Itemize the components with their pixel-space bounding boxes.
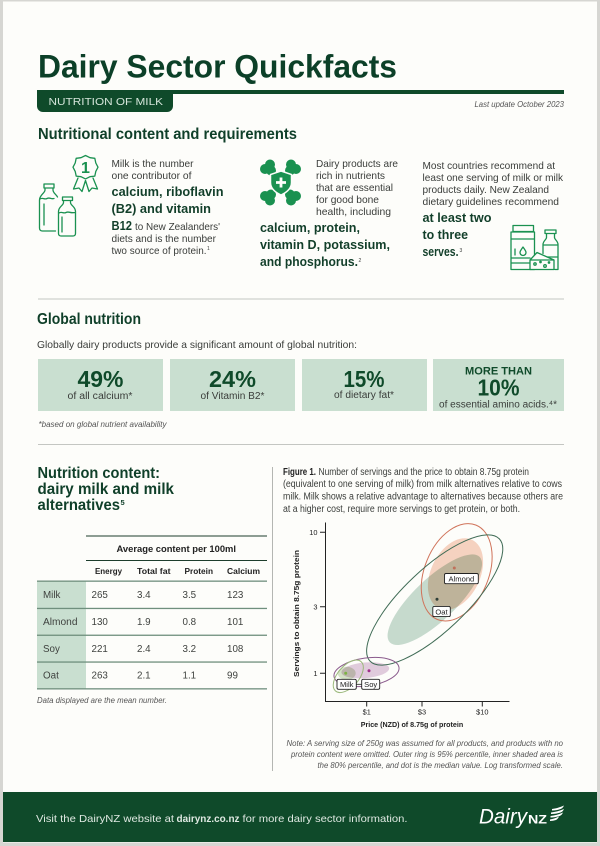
axis tick labels [309, 528, 488, 716]
stat card: calcium: 49% [78, 366, 124, 392]
icon: milk bottles with number one ribbon: 1 [81, 160, 90, 177]
axis tick labels: $3 [418, 708, 426, 716]
footer website text: for more dairy sector information. [242, 814, 408, 825]
nutrition table: Protein [184, 566, 213, 576]
nutrition table: 1.9 [137, 617, 151, 628]
nutrition table: 2.4 [137, 644, 151, 655]
text block: good bone health: that are essential [316, 183, 393, 194]
axes [320, 522, 510, 706]
header band: nutrition of milk [37, 90, 564, 112]
data label: milk and soy: Milk [340, 680, 354, 689]
text block: number one contributor: B12 [112, 218, 132, 233]
footer website text: dairynz.co.nz [176, 814, 240, 825]
text block: recommended serves: products daily. New Zealand [422, 185, 549, 196]
logo: DairyNZ: Dairy [479, 806, 528, 828]
axis tick labels: 3 [313, 602, 318, 612]
intro sentence: Globally dairy products provide a significant amount of global nutrition: [37, 340, 357, 351]
nutrition table: 3.2 [182, 644, 196, 655]
icon: bones and shield [260, 160, 301, 206]
stat card: vitamin B2: of Vitamin B2* [200, 391, 265, 402]
nutrition table: Almond [43, 617, 78, 628]
nutrition table [37, 536, 267, 690]
axis tick labels: 10 [309, 528, 318, 537]
figure caption: at a higher cost, require more servings to get protein, or both. [283, 504, 520, 515]
nutrition table: 0.8 [182, 617, 197, 628]
text block: number one contributor: Milk is the number [112, 159, 194, 170]
stat card: vitamin B2: 24% [209, 366, 256, 392]
text block: good bone health: Dairy products are [316, 159, 398, 170]
footer website text [36, 814, 408, 825]
footer website text: Visit the DairyNZ website at [36, 814, 174, 825]
outer 95 percent rings [328, 513, 521, 698]
stat card: dietary fat: 15% [344, 366, 384, 392]
heading: nutritional content and requirements: Nutritional content and requirements [38, 126, 297, 143]
text block: recommended serves: least one serving of milk or milk [422, 173, 564, 184]
data label: almond [444, 574, 478, 584]
icon: milk carton, bottle and cheese [511, 226, 558, 270]
text block: number one contributor: two source of protein. [112, 246, 206, 257]
axis tick labels: $1 [363, 708, 371, 716]
median dots [344, 566, 456, 675]
axis title: servings: Servings to obtain 8.75g protein [292, 550, 301, 677]
nutrition table: 2.1 [137, 670, 151, 682]
chart note: Note: A serving size of 250g was assumed for all products, and products with no [286, 739, 564, 748]
axis title: price: Price (NZD) of 8.75g of protein [361, 720, 463, 729]
footer band [3, 792, 597, 842]
chart note: protein content were omitted. Outer ring is 95% percentile, inner shaded area is [290, 750, 563, 759]
text block: recommended serves: dietary guidelines recommend [422, 197, 559, 208]
nutrition table: 101 [227, 617, 243, 628]
text block: number one contributor: (B2) and vitamin [112, 201, 211, 216]
figure caption: (equivalent to one serving of milk) from milk alternatives relative to cows [283, 479, 562, 490]
axis tick labels: $10 [476, 708, 488, 716]
axis tick labels: 1 [313, 669, 318, 678]
stat card: vitamin B2 [170, 359, 295, 411]
nutrition table: Soy [43, 644, 60, 655]
table footnote: Data displayed are the mean number. [37, 696, 167, 705]
nutrition table: 108 [227, 644, 244, 655]
footnote: global nutrient availability: *based on global nutrient availability [38, 420, 168, 429]
icon: milk bottles with number one ribbon [40, 156, 98, 236]
text block: good bone health: rich in nutrients [316, 171, 385, 182]
figure caption: Number of servings and the price to obtain 8.75g protein [318, 467, 529, 478]
text block: recommended serves: to three [422, 227, 468, 242]
heading: global nutrition: Global nutrition [37, 311, 141, 328]
heading: nutrition content: Nutrition content: [38, 465, 160, 482]
text block: good bone health [260, 159, 398, 269]
stat card: amino acids [433, 359, 564, 411]
nutrition table: 130 [92, 617, 108, 628]
data label: milk and soy [337, 679, 380, 689]
figure caption: Figure 1. [283, 467, 316, 478]
nutrition table: Energy [95, 566, 122, 576]
figure caption [283, 467, 563, 515]
scatter chart: servings against price [292, 513, 521, 729]
header band: nutrition of milk: NUTRITION OF MILK [48, 96, 163, 108]
nutrition table: 99 [227, 670, 238, 682]
text block: number one contributor: calcium, riboflavin [112, 184, 224, 199]
chart note: the 80% percentile, and dot is the median value. Log transformed scale. [318, 761, 563, 770]
stat card: dietary fat [302, 359, 427, 411]
data label: oat [433, 606, 450, 617]
data label: almond: Almond [449, 574, 474, 583]
data label: oat: Oat [435, 607, 449, 616]
text block: recommended serves: Most countries recommend at [422, 161, 555, 172]
text block: number one contributor [112, 159, 224, 257]
text block: good bone health: and phosphorus. [260, 254, 358, 269]
text block: good bone health: health, including [316, 207, 391, 218]
text block: recommended serves: serves. [422, 244, 458, 259]
title: Dairy Sector Quickfacts [38, 48, 397, 84]
text block: good bone health: calcium, protein, [260, 220, 360, 235]
text block: recommended serves: 3 [460, 248, 462, 254]
nutrition table: 123 [227, 590, 244, 601]
nutrition table: 221 [92, 644, 108, 655]
text block: good bone health: for good bone [316, 195, 379, 206]
text block: good bone health: 2 [358, 258, 362, 264]
data label: milk and soy: Soy [364, 680, 377, 689]
nutrition table: 265 [92, 590, 108, 601]
chart note [286, 739, 564, 770]
text block: recommended serves: at least two [422, 210, 492, 225]
stat card: amino acids: of essential amino acids.⁴* [439, 400, 557, 410]
logo: DairyNZ [479, 806, 564, 828]
text block: number one contributor: diets and is the number [112, 234, 217, 245]
heading: nutrition content: 5 [120, 498, 125, 507]
nutrition table: 3.5 [182, 590, 197, 601]
heading: nutrition content [38, 465, 174, 514]
nutrition table: Oat [43, 670, 59, 682]
stat card: amino acids: 10% [478, 374, 520, 400]
nutrition table: 3.4 [137, 590, 151, 601]
last update date: Last update October 2023 [474, 100, 565, 109]
figure caption: milk. Milk shows a relative advantage to alternatives because others are [283, 492, 563, 502]
logo: DairyNZ: NZ [528, 814, 547, 826]
heading: nutrition content: dairy milk and milk [38, 481, 174, 498]
nutrition table: 263 [92, 670, 108, 682]
heading: nutrition content: alternatives [38, 497, 120, 514]
text block: number one contributor: one contributor of [112, 171, 192, 182]
nutrition table: Calcium [227, 566, 260, 576]
text block: recommended serves [422, 161, 564, 259]
nutrition table: Average content per 100ml [116, 544, 236, 554]
stat card: amino acids: MORE THAN [465, 366, 532, 378]
text block: good bone health: vitamin D, potassium, [260, 237, 390, 252]
nutrition table: Milk [43, 590, 61, 601]
nutrition table: Total fat [137, 566, 171, 576]
stat card: dietary fat: of dietary fat* [334, 390, 394, 401]
nutrition table: 1.1 [182, 670, 196, 682]
stat card: calcium [38, 359, 163, 411]
stat card: calcium: of all calcium* [68, 391, 133, 402]
shaded 80 percent areas [338, 529, 494, 680]
text block: number one contributor: 1 [207, 246, 210, 252]
text block: number one contributor: to New Zealanders' [135, 222, 220, 233]
